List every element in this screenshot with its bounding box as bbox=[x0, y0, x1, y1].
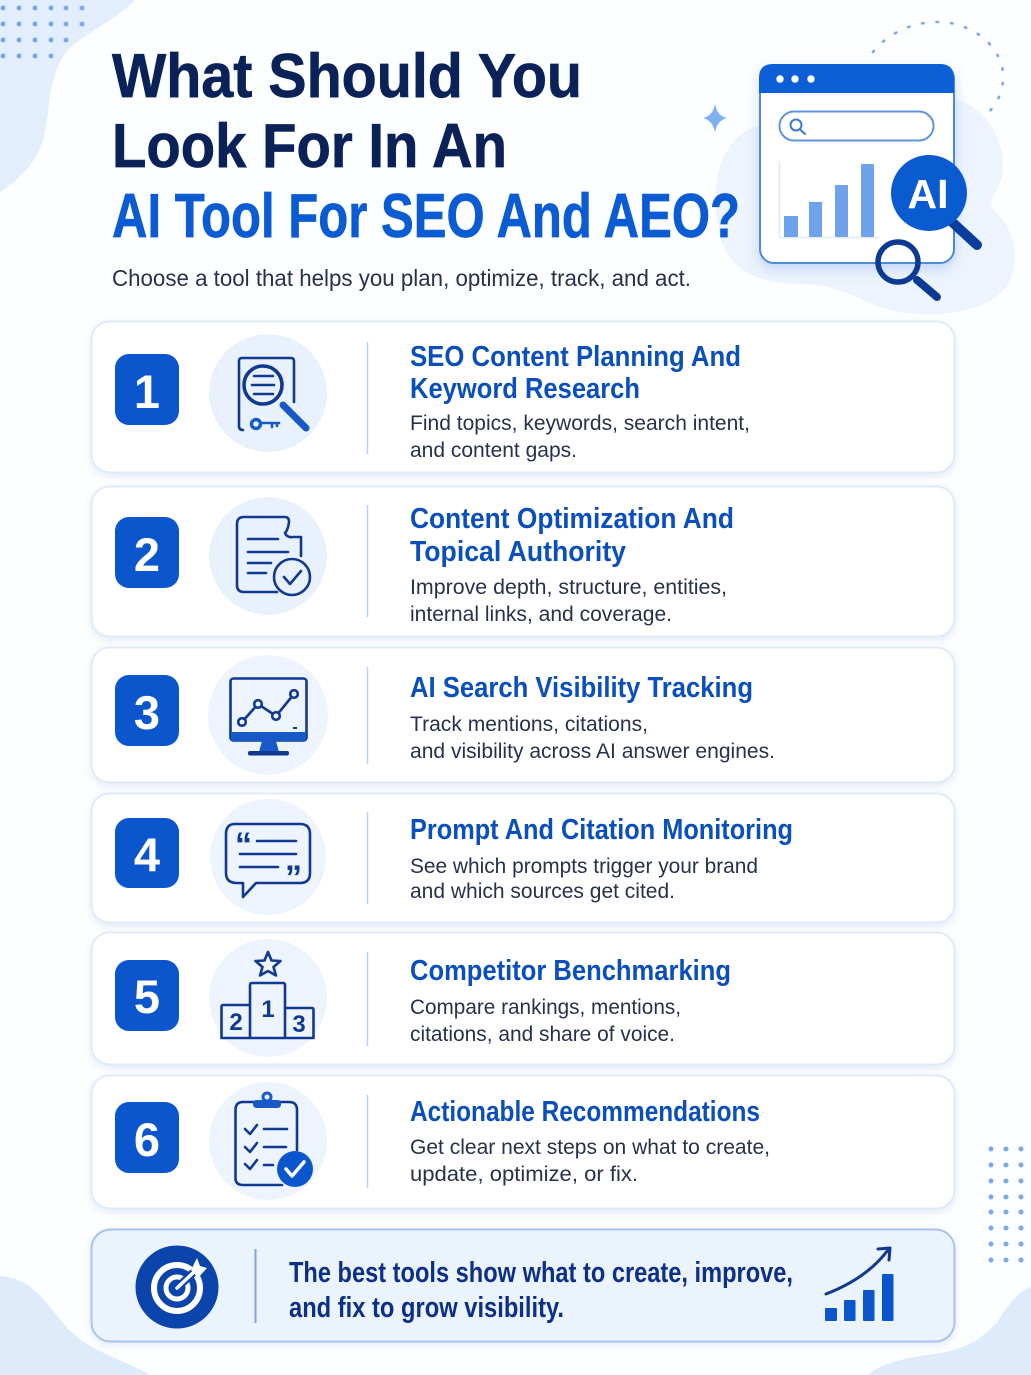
item 1 text bbox=[410, 341, 750, 462]
panel: item 6 bbox=[92, 1076, 954, 1208]
dot pattern: top left bbox=[0, 6, 84, 58]
icon: target with arrow bbox=[136, 1246, 218, 1328]
item 6 text: update, optimize, or fix. bbox=[410, 1162, 638, 1186]
number badge 3: 3 bbox=[134, 686, 160, 739]
item 1 text: Find topics, keywords, search intent, bbox=[410, 411, 750, 435]
item 6 text bbox=[410, 1096, 770, 1186]
panel: item 1 bbox=[92, 322, 954, 472]
item 1 text: Keyword Research bbox=[410, 373, 640, 405]
item 5 text: Competitor Benchmarking bbox=[410, 955, 731, 987]
panel: item 4 bbox=[92, 794, 954, 922]
icon: document search with key bbox=[209, 334, 327, 452]
number badge 1 bbox=[115, 354, 179, 425]
title bbox=[112, 42, 740, 251]
item 3 text: Track mentions, citations, bbox=[410, 712, 648, 736]
icon: speech bubble with quotes: ” bbox=[285, 859, 302, 897]
dot pattern: right bbox=[988, 1146, 1024, 1262]
number badge 4: 4 bbox=[134, 828, 160, 881]
icon: podium with star: 3 bbox=[292, 1011, 306, 1038]
item 2 text: Improve depth, structure, entities, bbox=[410, 575, 727, 599]
icon: podium with star bbox=[209, 939, 327, 1057]
title: AI Tool For SEO And AEO? bbox=[112, 182, 740, 251]
icon: monitor with line chart bbox=[208, 655, 328, 775]
item 1 text: SEO Content Planning And bbox=[410, 341, 741, 373]
item 4 text: See which prompts trigger your brand bbox=[410, 854, 758, 878]
panel: item 3 bbox=[92, 648, 954, 782]
callout text: and fix to grow visibility. bbox=[289, 1292, 564, 1324]
number badge 5 bbox=[115, 960, 179, 1031]
subtitle: Choose a tool that helps you plan, optimize, track, and act. bbox=[112, 265, 691, 291]
title: What Should You bbox=[112, 42, 582, 111]
title: Look For In An bbox=[112, 112, 507, 181]
number badge 3 bbox=[115, 675, 179, 746]
number badge 2 bbox=[115, 517, 179, 588]
icon: checklist clipboard bbox=[209, 1082, 327, 1200]
item 2 text: Content Optimization And bbox=[410, 503, 734, 535]
number badge 4 bbox=[115, 818, 179, 888]
panel: item 2 bbox=[92, 486, 954, 636]
background blob: bottom left bbox=[0, 1276, 150, 1375]
icon: podium with star: 1 bbox=[261, 996, 275, 1023]
callout text bbox=[289, 1257, 793, 1324]
callout text: The best tools show what to create, improve, bbox=[289, 1257, 793, 1289]
number badge 5: 5 bbox=[134, 970, 160, 1023]
item 6 text: Get clear next steps on what to create, bbox=[410, 1135, 770, 1159]
item 1 text: and content gaps. bbox=[410, 438, 577, 462]
number badge 6 bbox=[115, 1102, 179, 1173]
icon: speech bubble with quotes bbox=[210, 799, 326, 915]
icon: speech bubble with quotes: “ bbox=[235, 826, 252, 864]
number badge 1: 1 bbox=[134, 365, 160, 418]
item 2 text: internal links, and coverage. bbox=[410, 602, 672, 626]
panel: bottom callout bbox=[92, 1230, 954, 1342]
panel: item 5 bbox=[92, 932, 954, 1064]
item 3 text: AI Search Visibility Tracking bbox=[410, 672, 753, 704]
hero illustration: browser window with AI magnifier: AI bbox=[908, 171, 948, 217]
icon: document with check bbox=[209, 497, 327, 615]
background blob: top left bbox=[0, 0, 135, 192]
icon: podium with star: 2 bbox=[229, 1009, 243, 1036]
item 5 text: citations, and share of voice. bbox=[410, 1022, 675, 1046]
item 3 text: and visibility across AI answer engines. bbox=[410, 739, 775, 763]
item 2 text: Topical Authority bbox=[410, 536, 626, 568]
number badge 2: 2 bbox=[134, 528, 160, 581]
item 4 text: and which sources get cited. bbox=[410, 879, 675, 903]
icon: growth bars with arrow bbox=[825, 1248, 894, 1321]
background blob: bottom right bbox=[867, 1287, 1031, 1375]
item 4 text: Prompt And Citation Monitoring bbox=[410, 814, 793, 846]
item 5 text: Compare rankings, mentions, bbox=[410, 995, 681, 1019]
item 4 text bbox=[410, 814, 793, 903]
hero illustration: browser window with AI magnifier bbox=[703, 22, 1015, 314]
item 5 text bbox=[410, 955, 731, 1046]
item 3 text bbox=[410, 672, 775, 763]
number badge 6: 6 bbox=[134, 1113, 160, 1166]
item 6 text: Actionable Recommendations bbox=[410, 1096, 760, 1128]
item 2 text bbox=[410, 503, 734, 626]
